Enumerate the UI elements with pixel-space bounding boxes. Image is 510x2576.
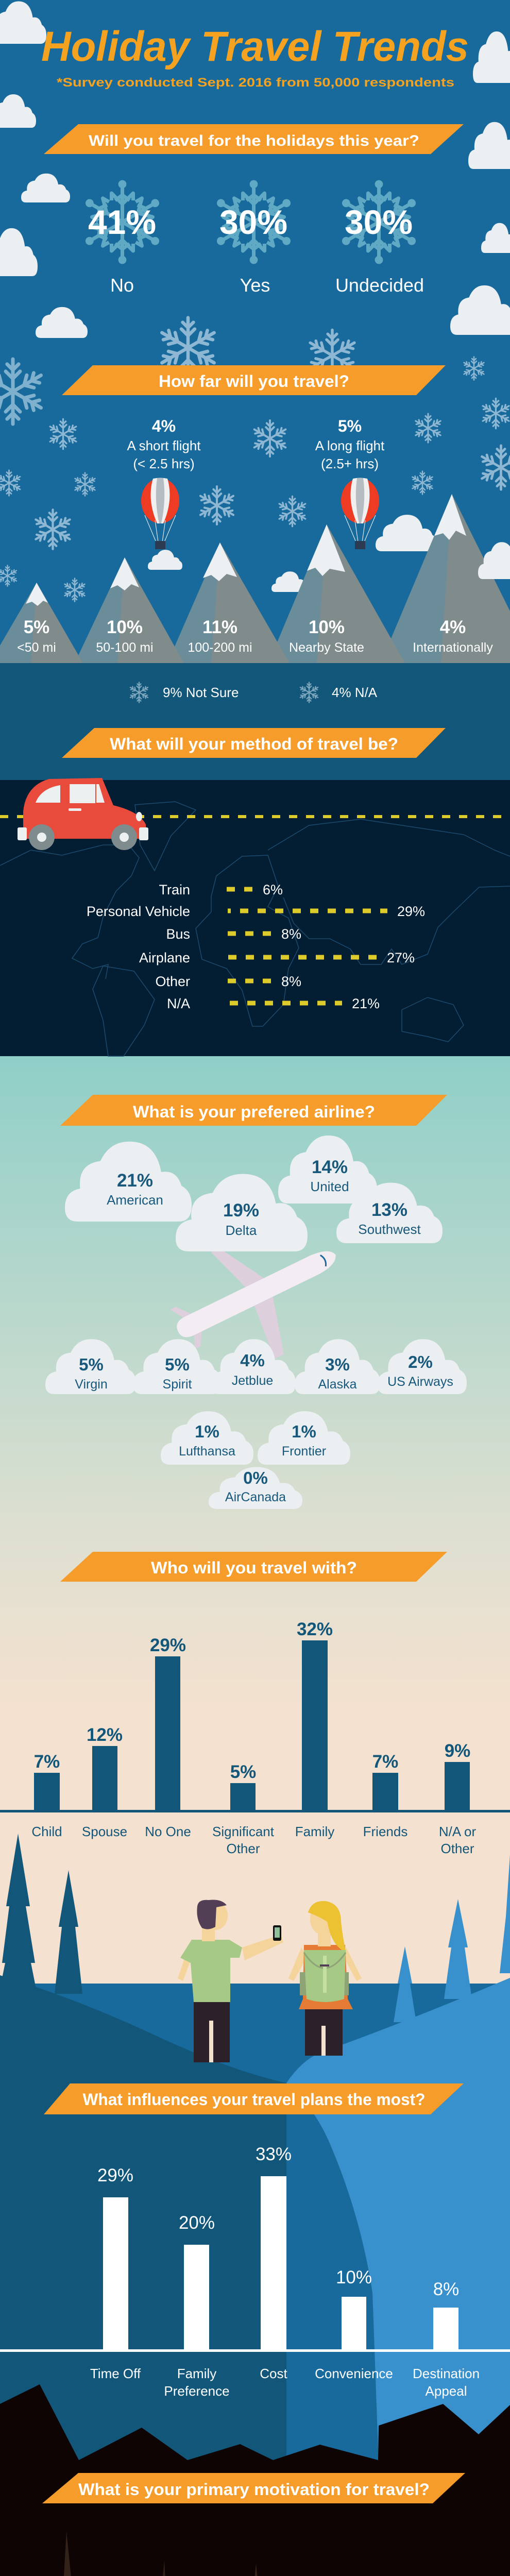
- cloud: american: [65, 1142, 192, 1222]
- row: n/a: N/A: [167, 996, 190, 1011]
- clouds: section 2: [148, 515, 437, 592]
- cloud: behind right mountain: [478, 542, 510, 579]
- stat: long flight: A long flight: [315, 438, 385, 453]
- stat: nearby state: 10%: [309, 617, 345, 637]
- icon: snowflake No: [81, 180, 164, 264]
- bar: n/a or other: N/A or: [439, 1824, 476, 1839]
- cloud: spirit: 5%: [165, 1355, 190, 1374]
- row: personal vehicle: 29%: [397, 904, 425, 919]
- row: train: 6%: [263, 882, 283, 897]
- stat: <50 mi: [17, 617, 56, 655]
- background: dark band: [0, 663, 510, 781]
- cloud: spirit: Spirit: [163, 1377, 192, 1392]
- background: sky gradient: [0, 1056, 510, 1984]
- stat: Undecided: [335, 203, 424, 296]
- bar: time off: 29%: [97, 2165, 133, 2185]
- bar: significant other: Significant: [212, 1824, 275, 1839]
- bar: no one: No One: [145, 1824, 191, 1839]
- row: bus: 8%: [281, 926, 301, 942]
- stat: nearby state: [289, 617, 364, 655]
- stat: internationally: 4%: [440, 617, 466, 637]
- row: train: Train: [159, 882, 190, 897]
- background: winter sky: [0, 0, 510, 665]
- bar: destination appeal: 8%: [433, 2279, 459, 2299]
- bar: spouse: 12%: [87, 1725, 123, 1745]
- cloud: jetblue: 4%: [240, 1351, 265, 1370]
- banner: how far: How far will you travel?: [159, 372, 349, 391]
- bar: child: 7%: [34, 1752, 60, 1772]
- cloud: spirit: [133, 1339, 222, 1394]
- subtitle: *Survey conducted Sept. 2016 from 50,000 respondents: [57, 76, 454, 90]
- cloud: aircanada: 0%: [243, 1468, 268, 1487]
- bar: n/a or other: Other: [440, 1841, 474, 1856]
- banner: preferred airline: What is your prefered airline?: [133, 1103, 375, 1121]
- hills: [0, 1975, 286, 2463]
- bar: cost: 33%: [256, 2144, 292, 2164]
- cloud: alaska: [295, 1339, 380, 1394]
- bar: family preference: Preference: [164, 2383, 230, 2399]
- cloud: american: American: [107, 1192, 163, 1208]
- bar: significant other: 5%: [230, 1762, 256, 1782]
- row: airplane: 27%: [387, 950, 415, 965]
- legend: not sure / na: [129, 682, 378, 703]
- row: other: Other: [155, 974, 190, 989]
- cloud: jetblue: [210, 1339, 296, 1394]
- cloud: southwest: 13%: [371, 1200, 407, 1220]
- bar: time off: Time Off: [90, 2366, 141, 2381]
- bar: convenience: Convenience: [315, 2366, 393, 2381]
- bar: significant other: [212, 1762, 275, 1856]
- stat: long flight: 5%: [338, 417, 362, 435]
- bar: family: 32%: [297, 1619, 333, 1639]
- bar: family preference: 20%: [179, 2213, 215, 2233]
- woman: [288, 1901, 362, 2056]
- stat: short flight: (< 2.5 hrs): [133, 456, 195, 471]
- bar: friends: [363, 1752, 407, 1839]
- banner: method of travel: [62, 728, 446, 758]
- title: Holiday Travel Trends: [41, 23, 469, 70]
- cloud: delta: 19%: [223, 1200, 259, 1221]
- banner: motivation: What is your primary motivation for travel?: [78, 2480, 430, 2499]
- stat: long flight: (2.5+ hrs): [321, 456, 379, 471]
- bar: family preference: [164, 2213, 230, 2399]
- stat: short flight: 4%: [152, 417, 176, 435]
- cloud: united: [278, 1136, 377, 1204]
- stats: distances: [17, 617, 493, 655]
- bar: child: Child: [31, 1824, 62, 1839]
- cloud: us airways: 2%: [408, 1352, 433, 1371]
- cloud: us airways: US Airways: [387, 1375, 453, 1389]
- banner: influences: What influences your travel plans the most?: [82, 2090, 426, 2109]
- trees: right light: [394, 1855, 510, 2022]
- bar: friends: Friends: [363, 1824, 407, 1839]
- bar: time off: [90, 2165, 141, 2381]
- bar: significant other: Other: [226, 1841, 260, 1856]
- row: airplane: Airplane: [139, 950, 190, 965]
- mountains: [0, 494, 510, 663]
- stat: <50 mi: 5%: [24, 617, 49, 637]
- icon: balloon left: [141, 478, 179, 549]
- bar: friends: 7%: [372, 1752, 398, 1772]
- background: world map night: [0, 780, 510, 1056]
- bar: destination appeal: [413, 2279, 480, 2399]
- cloud: aircanada: AirCanada: [225, 1490, 286, 1504]
- cloud: us airways: [378, 1339, 467, 1394]
- clouds: section 1 decoration: [0, 2, 510, 338]
- stat: short flight: [127, 417, 201, 471]
- banner: travel with: Who will you travel with?: [151, 1558, 357, 1577]
- chart: who will you travel with: [0, 1619, 510, 1856]
- bar: cost: [256, 2144, 292, 2381]
- row: other: 8%: [281, 974, 301, 989]
- icon: airplane: [153, 1204, 365, 1392]
- stat: long flight: [315, 417, 385, 471]
- stat: internationally: Internationally: [413, 640, 493, 655]
- bar: n/a or other: 9%: [445, 1741, 470, 1761]
- stat: Yes: Yes: [240, 275, 270, 296]
- bar: family: [295, 1619, 334, 1839]
- banner: preferred airline: [60, 1095, 447, 1126]
- bar: family: Family: [295, 1824, 334, 1839]
- stat: No: [88, 203, 156, 296]
- bar: n/a or other: [439, 1741, 476, 1856]
- stat: Yes: [219, 203, 287, 296]
- icon: snowflake Undecided: [337, 180, 420, 264]
- cloud: delta: Delta: [226, 1223, 257, 1238]
- brown spikes band: [0, 2531, 510, 2576]
- decorative snowflakes: [0, 317, 510, 602]
- stat: internationally: [413, 617, 493, 655]
- bar: no one: [145, 1635, 191, 1839]
- world map outlines: [0, 802, 510, 1056]
- stat: short flight: A short flight: [127, 438, 201, 453]
- bar: child: [31, 1752, 62, 1839]
- cloud: alaska: Alaska: [318, 1377, 357, 1392]
- bar: convenience: [315, 2267, 393, 2381]
- row: bus: [166, 926, 301, 942]
- cloud: frontier: [258, 1411, 350, 1465]
- stat: 100-200 mi: [188, 617, 252, 655]
- bar: cost: Cost: [260, 2366, 288, 2381]
- banner: will you travel: Will you travel for the holidays this year?: [89, 132, 419, 149]
- cloud: virgin: Virgin: [75, 1377, 108, 1392]
- panel: airline clouds: [45, 1136, 467, 1509]
- stat: 100-200 mi: 11%: [202, 617, 237, 637]
- cloud: virgin: [45, 1339, 136, 1394]
- cloud: frontier: 1%: [292, 1422, 316, 1441]
- bar: no one: 29%: [150, 1635, 186, 1655]
- illustration: couple: [178, 1900, 362, 2062]
- banner: influences: [44, 2083, 464, 2114]
- banner: will you travel: [44, 124, 464, 154]
- cloud: southwest: [336, 1183, 443, 1243]
- row: n/a: [167, 996, 380, 1011]
- cloud: american: 21%: [117, 1171, 153, 1191]
- cloud: lufthansa: Lufthansa: [179, 1444, 235, 1459]
- cloud: delta: [176, 1174, 308, 1251]
- row: personal vehicle: Personal Vehicle: [87, 904, 190, 919]
- stat: <50 mi: <50 mi: [17, 640, 56, 655]
- banner: how far: [62, 365, 446, 395]
- cloud: lufthansa: 1%: [195, 1422, 219, 1441]
- bar: destination appeal: Destination: [413, 2366, 480, 2381]
- dashed road line: [0, 815, 510, 818]
- row: airplane: [139, 950, 415, 965]
- stat: 100-200 mi: 100-200 mi: [188, 640, 252, 655]
- stat: 50-100 mi: 50-100 mi: [96, 640, 154, 655]
- banner: motivation: [42, 2473, 465, 2503]
- legend: not sure / na: 4% N/A: [332, 685, 378, 700]
- dark mountain silhouette: [0, 2384, 510, 2576]
- banner: method of travel: What will your method of travel be?: [110, 735, 398, 753]
- cloud: alaska: 3%: [325, 1355, 350, 1374]
- row: train: [159, 882, 283, 897]
- cloud: united: United: [310, 1179, 349, 1194]
- cloud: aircanada: [209, 1467, 302, 1509]
- stat: Undecided: 30%: [345, 203, 413, 241]
- stat: Yes: 30%: [219, 203, 287, 241]
- icon: snowflake Yes: [212, 180, 295, 264]
- bar: family preference: Family: [177, 2366, 216, 2381]
- stat: No: No: [110, 275, 134, 296]
- icon: balloon right: [341, 478, 379, 549]
- stat: No: 41%: [88, 203, 156, 241]
- legend: not sure / na: 9% Not Sure: [163, 685, 239, 700]
- stat: 50-100 mi: [96, 617, 154, 655]
- row: bus: Bus: [166, 926, 190, 942]
- cloud: united: 14%: [312, 1157, 348, 1177]
- cloud: lufthansa: [161, 1411, 253, 1465]
- stat: 50-100 mi: 10%: [107, 617, 143, 637]
- bar: convenience: 10%: [336, 2267, 372, 2287]
- panel: travel answers: [81, 180, 424, 296]
- bar: spouse: [82, 1725, 127, 1839]
- cloud: southwest: Southwest: [358, 1222, 421, 1237]
- stat: nearby state: Nearby State: [289, 640, 364, 655]
- cloud: jetblue: Jetblue: [232, 1374, 273, 1388]
- icon: red car: [18, 778, 148, 850]
- row: personal vehicle: [87, 904, 425, 919]
- chart: influences: [0, 2144, 510, 2399]
- chart: method of travel: [87, 882, 425, 1011]
- stat: Undecided: Undecided: [335, 275, 424, 296]
- cloud: frontier: Frontier: [282, 1444, 326, 1459]
- man: [178, 1900, 283, 2062]
- row: n/a: 21%: [352, 996, 380, 1011]
- trees: left dark: [0, 1834, 82, 1994]
- row: other: [155, 974, 301, 989]
- bar: destination appeal: Appeal: [426, 2383, 467, 2399]
- bar: spouse: Spouse: [82, 1824, 127, 1839]
- cloud: virgin: 5%: [79, 1355, 104, 1374]
- banner: travel with: [60, 1552, 447, 1582]
